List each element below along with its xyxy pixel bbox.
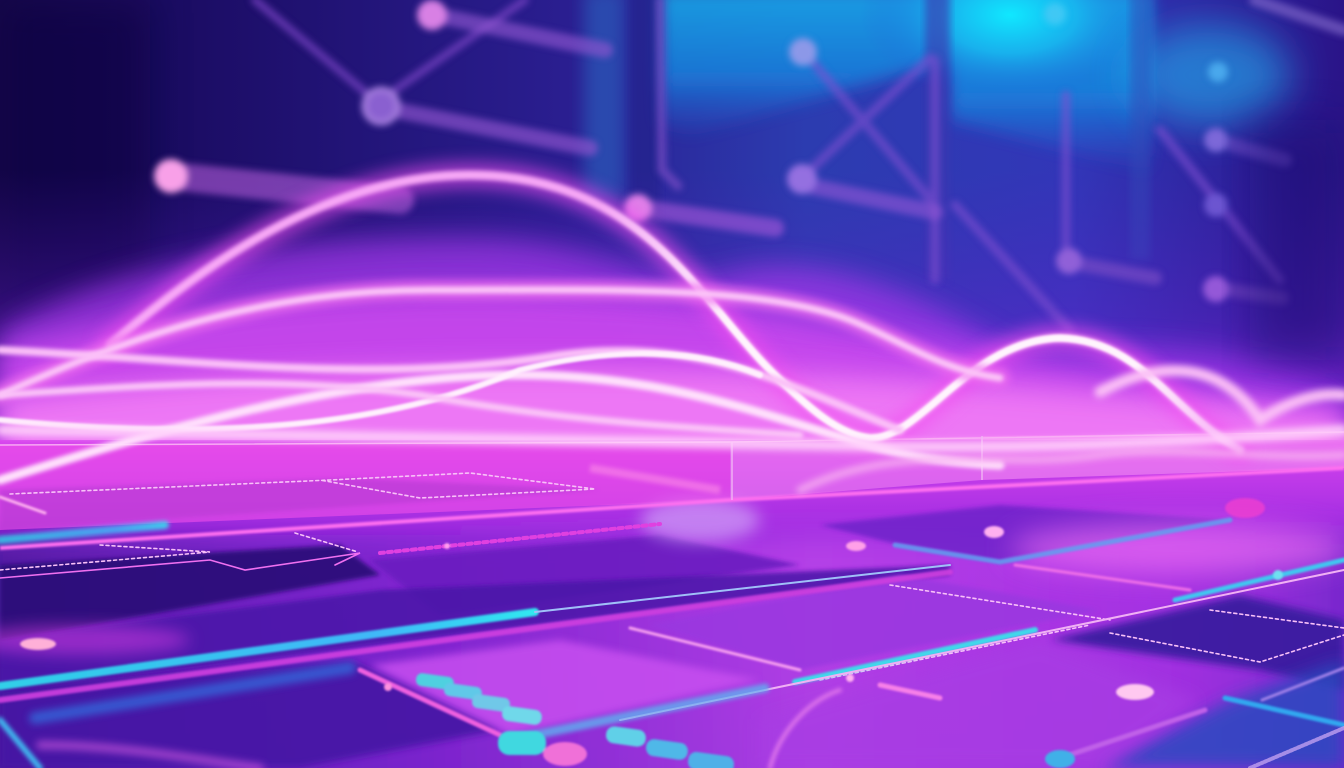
chip lights: glowing pads and dots	[20, 498, 1283, 768]
circuit traces: dashes and glowing rails	[0, 473, 1344, 768]
floor: circuit board surface	[0, 440, 1344, 768]
wave haze: soft purple hills behind the lines	[0, 238, 1344, 520]
wave: lower bright ribbons	[0, 350, 1344, 490]
wave lines: glowing ribbons	[0, 175, 1344, 490]
vignette: right edge shade	[1250, 120, 1344, 360]
wave: middle ribbon	[0, 290, 1000, 395]
glass ledge: pink strip under waves	[0, 432, 1344, 548]
network lines: blurred background nodes	[154, 0, 1344, 330]
wave: tall crest	[110, 175, 1240, 450]
